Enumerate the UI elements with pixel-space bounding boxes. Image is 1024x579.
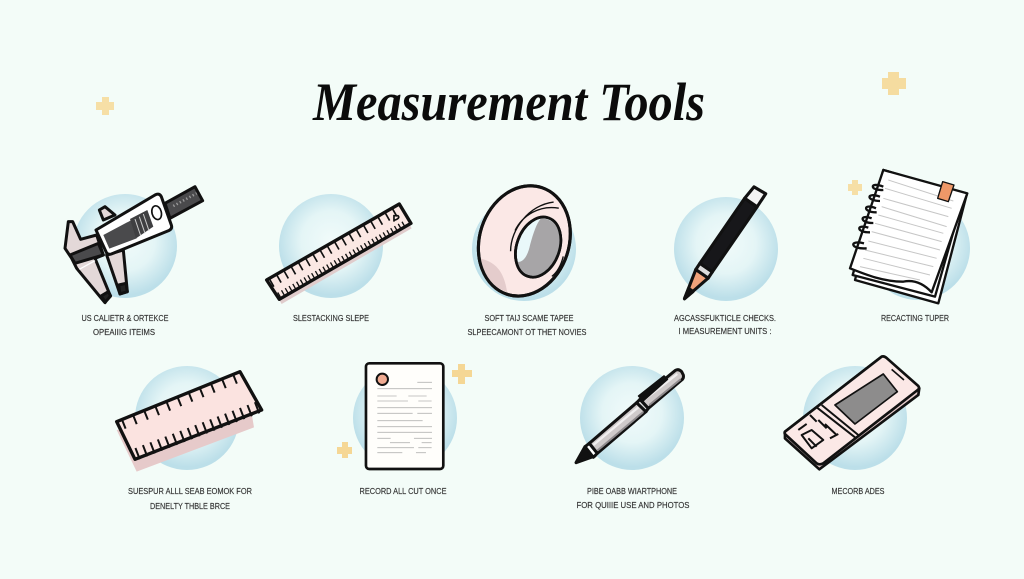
- tool 1: calipers: [65, 187, 203, 337]
- icon: large ruler: [117, 372, 262, 472]
- background circle: [135, 366, 239, 470]
- tool 6: large ruler: DENELTY THBLE BRCE: [150, 502, 230, 511]
- icon: document: [366, 363, 443, 469]
- icon: pencil: [684, 187, 766, 299]
- tool 2: ruler: [267, 194, 412, 323]
- label: AGCASSFUKTICLE CHECKS.: [674, 314, 776, 323]
- label: PIBE OABB WIARTPHONE: [587, 487, 677, 496]
- background circle: [803, 366, 907, 470]
- label: US CALIETR & ORTEKCE: [82, 314, 168, 323]
- decorative cross: upper right: [452, 364, 472, 384]
- icon: tape roll: [464, 174, 584, 308]
- label: SLESTACKING SLEPE: [293, 314, 369, 323]
- icon: phone: [785, 356, 919, 469]
- tool 9: phone: [785, 356, 919, 496]
- tool 6: large ruler: [117, 366, 262, 511]
- decorative cross: top right: [882, 72, 906, 95]
- tool 3: tape: [464, 174, 586, 337]
- title: Measurement Tools: [312, 72, 705, 132]
- background circle: [866, 196, 970, 300]
- background circle: [674, 197, 778, 301]
- label: RECORD ALL CUT ONCE: [360, 487, 446, 496]
- background circle: [353, 366, 457, 470]
- label: SOFT TAIJ SCAME TAPEE: [484, 314, 574, 323]
- icon: calipers: [65, 187, 203, 303]
- tool 4: pencil: [674, 187, 778, 336]
- label: RECACTING TUPER: [881, 314, 949, 323]
- background circle: [580, 366, 684, 470]
- decorative cross: top left: [96, 97, 114, 115]
- background circle: [279, 194, 383, 298]
- label: MECORB ADES: [832, 487, 884, 496]
- tool 4: pencil: I MEASUREMENT UNITS :: [678, 327, 772, 336]
- tool 8: pen: FOR QUIIIE USE AND PHOTOS: [576, 501, 690, 510]
- icon: ruler: [267, 204, 412, 304]
- background circle: [472, 197, 576, 301]
- background circle: [73, 194, 177, 298]
- tool 7: document: [337, 363, 472, 496]
- icon: pen: [576, 370, 683, 463]
- tool 3: tape: SLPEECAMONT OT THET NOVIES: [468, 328, 586, 337]
- tool 5: notebook: [848, 170, 970, 323]
- icon: notebook: [850, 170, 967, 303]
- decorative cross: [848, 180, 862, 195]
- tool 1: calipers: OPEAIIIG ITEIMS: [93, 328, 155, 337]
- label: SUESPUR ALLL SEAB EOMOK FOR: [128, 487, 252, 496]
- decorative cross: lower left: [337, 442, 352, 458]
- tool 8: pen: [576, 366, 690, 510]
